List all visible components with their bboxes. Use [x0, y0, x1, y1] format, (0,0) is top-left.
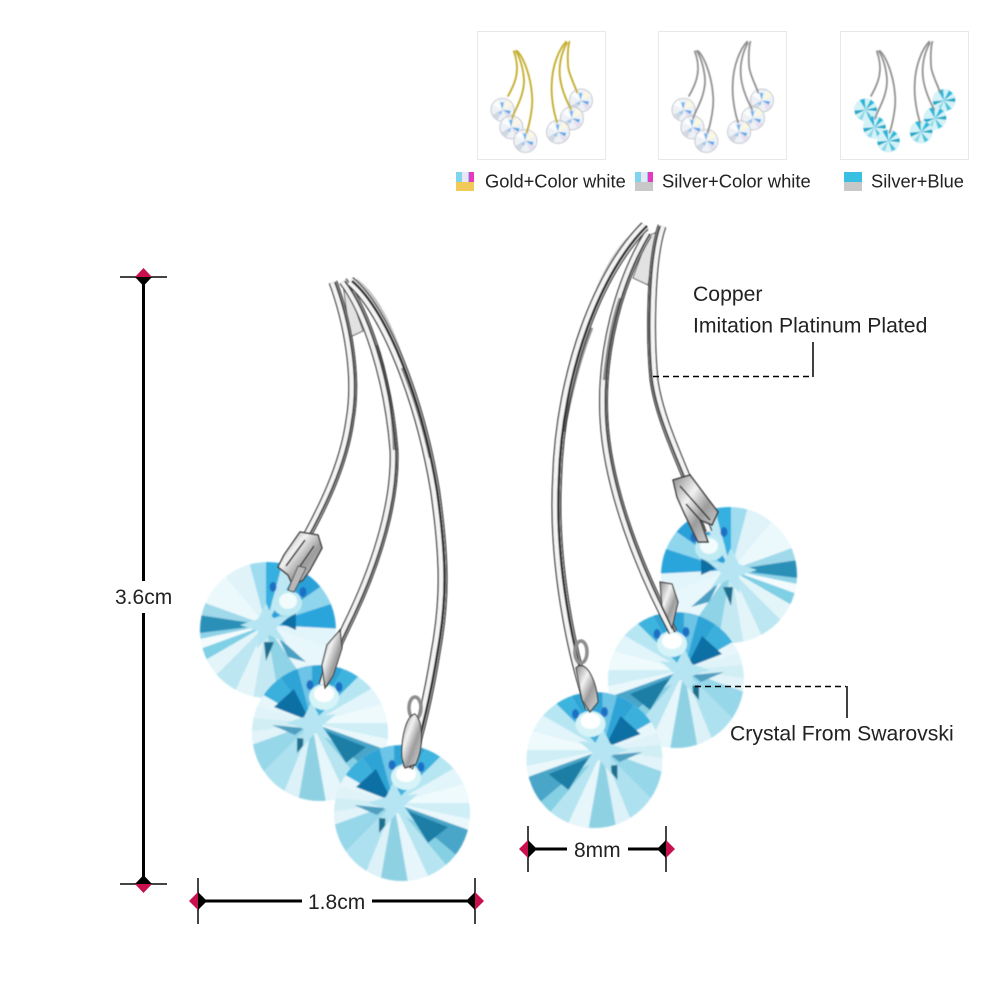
dimension: crystal 8mm	[519, 826, 675, 872]
legend: gold and color white: Gold+Color white	[485, 170, 626, 192]
thumbnail: silver and blue	[840, 32, 968, 160]
metal wires: right earring	[556, 226, 708, 708]
crystals: right earring	[502, 470, 831, 848]
legend: silver and color white: Silver+Color white	[662, 170, 811, 192]
dimension: width 1.8cm	[189, 878, 484, 924]
metal wires: left earring	[298, 280, 445, 768]
callout: swarovski crystal: Crystal From Swarovski	[730, 722, 954, 746]
dimension: width 1.8cm: 1.8cm	[308, 891, 365, 914]
dimension: height 3.6cm	[115, 268, 172, 893]
thumbnail: gold and color white	[478, 32, 606, 160]
bails: right earring	[575, 475, 718, 712]
earring: left	[166, 280, 494, 902]
bails: left earring	[278, 532, 422, 768]
dimension: height 3.6cm: 3.6cm	[115, 586, 172, 609]
legend: silver and blue: Silver+Blue	[871, 170, 964, 192]
crystals: left earring	[166, 525, 494, 902]
earring: right	[502, 226, 831, 848]
callout: copper plating: Copper	[693, 283, 762, 306]
callout: copper plating	[653, 283, 927, 377]
thumbnail: silver and color white	[658, 32, 786, 160]
dimension: crystal 8mm: 8mm	[574, 839, 621, 862]
callout: copper plating: Imitation Platinum Plated	[693, 314, 927, 338]
